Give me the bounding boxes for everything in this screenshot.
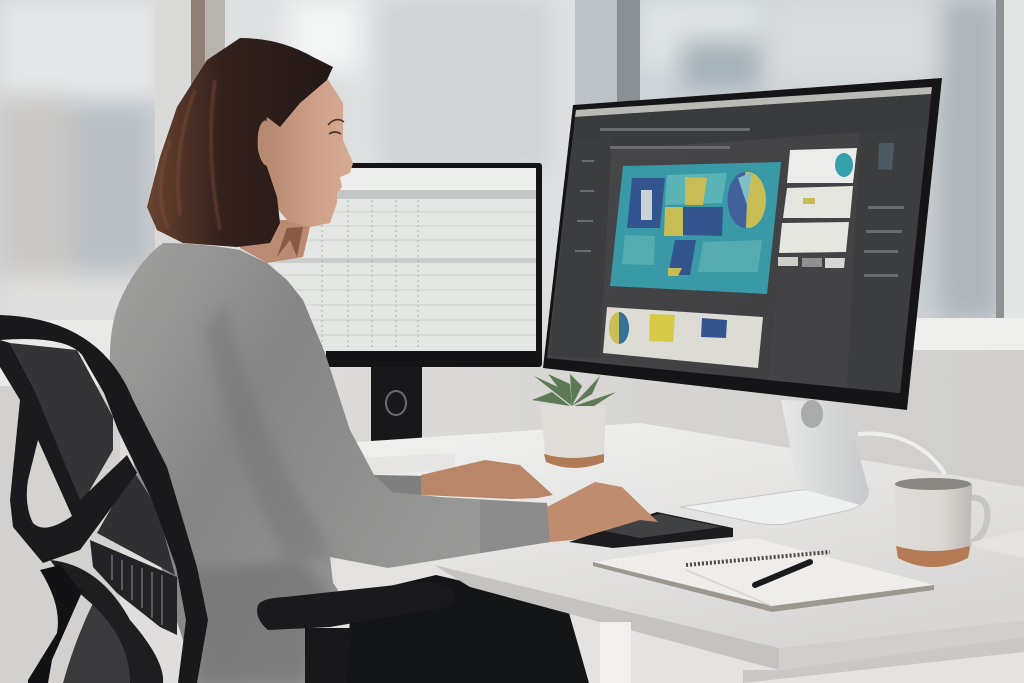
second notebook at right edge: [972, 530, 1024, 558]
seat mesh: [63, 603, 130, 683]
inspector thumbnail: [878, 143, 894, 170]
screen: [547, 87, 932, 393]
coffee mug: [894, 478, 987, 567]
curved arm: [50, 560, 163, 683]
secondary monitor: spreadsheet: [274, 163, 542, 458]
office chair: [0, 315, 208, 683]
teal artboard: [610, 162, 781, 294]
chair armrest: [257, 582, 454, 683]
lower mesh: [97, 470, 175, 575]
chair back frame: [0, 315, 208, 683]
main monitor: [543, 78, 942, 525]
cable: [858, 433, 945, 474]
face: [258, 78, 353, 227]
graphics tablet: [569, 512, 733, 548]
trousers under desk: [345, 575, 589, 683]
monitor frame: [543, 78, 942, 410]
near hand: [547, 482, 658, 542]
wall and sill: [900, 318, 1024, 350]
pie chart: [728, 172, 766, 228]
right thumbnails: [778, 148, 857, 268]
woman: [110, 38, 658, 683]
far hand: [421, 460, 553, 499]
window frames: [155, 0, 1024, 340]
side panels: [847, 128, 927, 393]
ear: [258, 120, 272, 166]
sleeve cuffs: [480, 500, 550, 553]
desk: [356, 423, 1024, 683]
hair wisps: [277, 227, 303, 257]
neck: [240, 220, 310, 263]
chair leg: [28, 565, 82, 683]
left bar and loop: [0, 340, 137, 563]
hair: [147, 38, 333, 247]
monitor stand: [680, 400, 868, 525]
plant in white pot: [532, 374, 616, 468]
upper mesh: [10, 343, 113, 507]
notebook and pen: [593, 538, 934, 612]
sleeve shading: [205, 300, 330, 560]
torso and sleeve: [110, 243, 550, 683]
eye and brow: [328, 120, 344, 134]
bottom filmstrip: [603, 307, 763, 368]
lumbar support: [90, 540, 177, 635]
